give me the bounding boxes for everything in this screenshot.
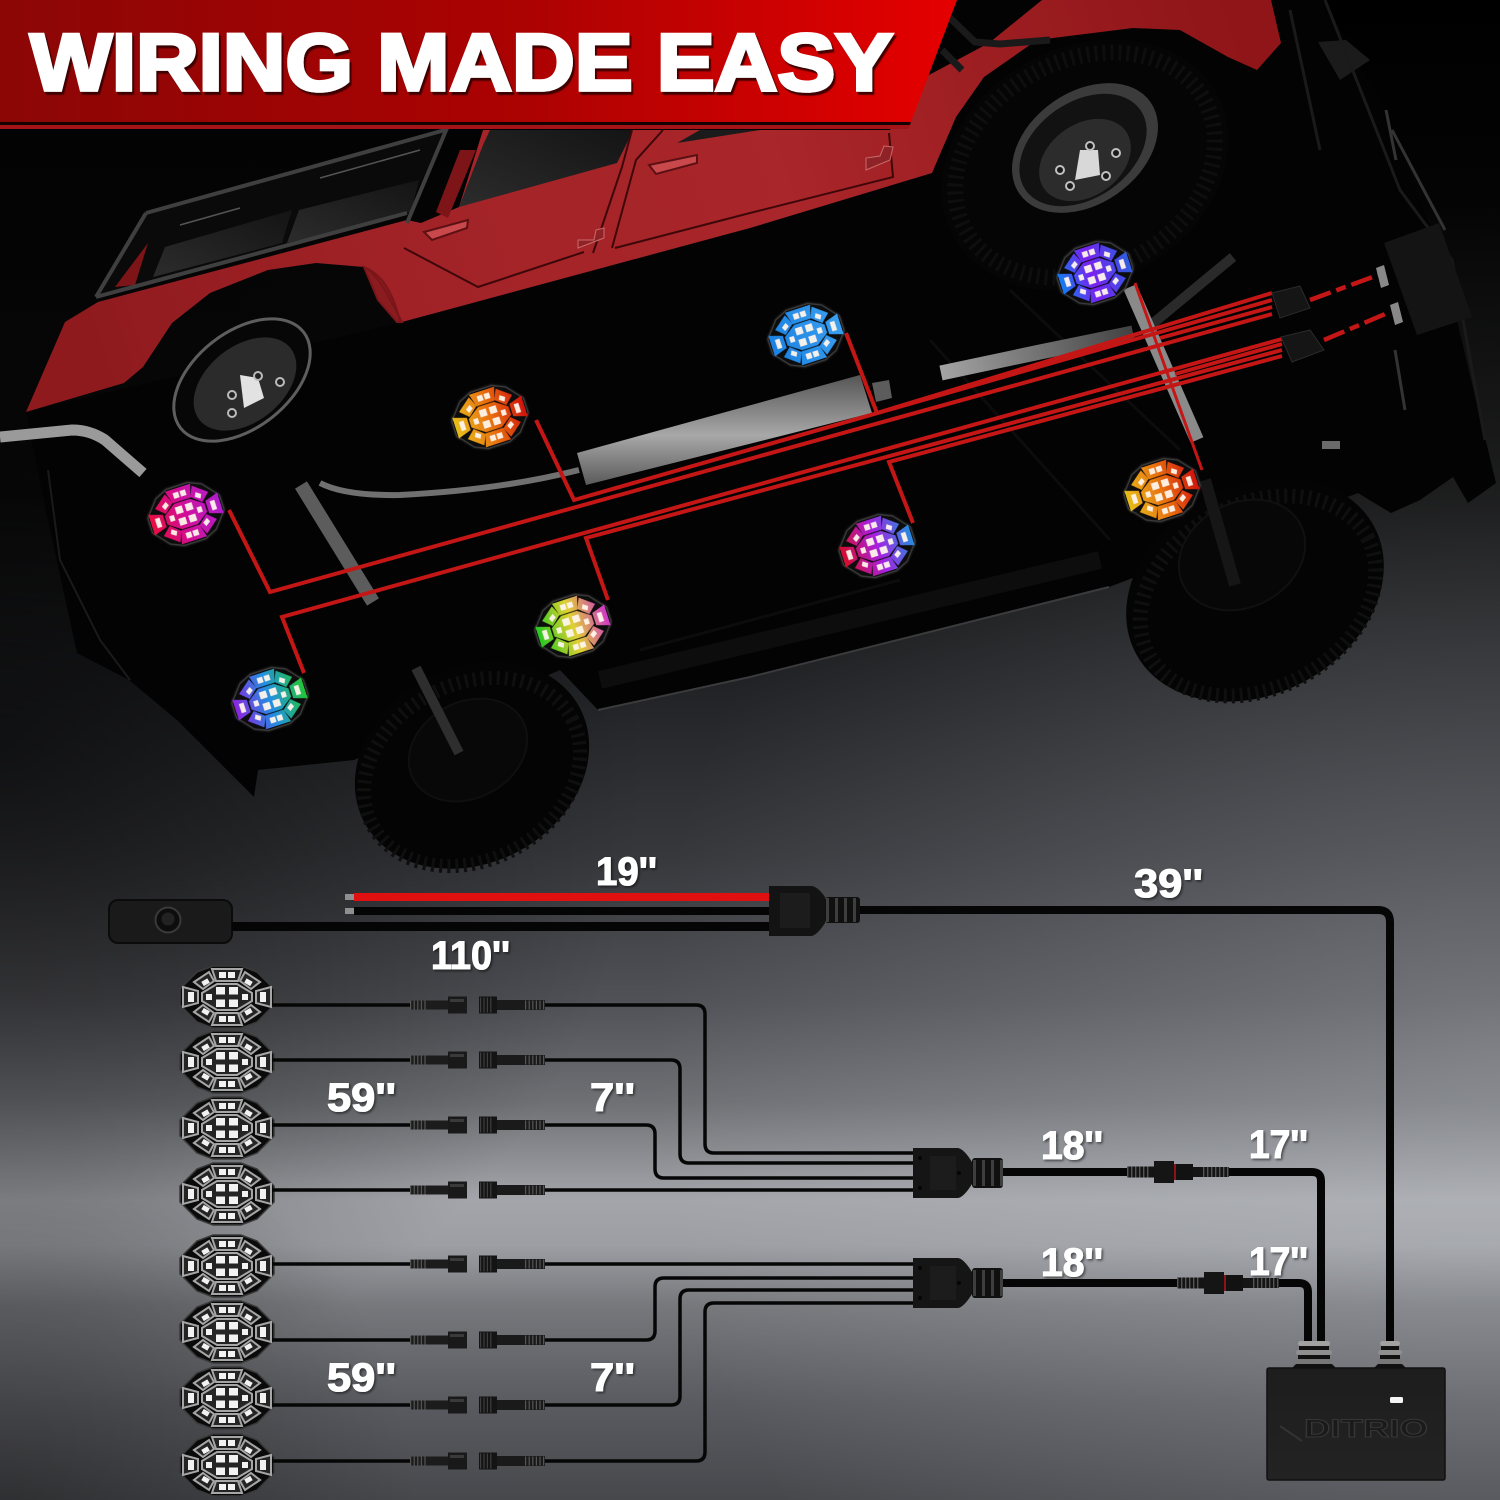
glowing rock light: yellow to red <box>445 377 535 457</box>
length label 39 in: 39'' <box>1134 862 1203 906</box>
upper Y connector <box>913 1148 1003 1198</box>
door windows <box>436 130 760 218</box>
lower chassis edge <box>48 290 1180 710</box>
length label lower 7 in: 7'' <box>590 1356 635 1400</box>
glowing rock light: pink <box>141 474 231 554</box>
length label lower 59 in: 59'' <box>327 1356 396 1400</box>
glowing rock light: sky blue <box>761 295 851 375</box>
wheel: upper right spare tire <box>897 0 1273 340</box>
red power lead <box>345 893 770 901</box>
vehicle underside silhouette <box>26 0 1496 797</box>
39 inch cable <box>860 910 1390 1342</box>
red body panel <box>26 0 1281 412</box>
exhaust pipes and crossbars <box>301 257 1233 602</box>
engine bay cables <box>942 18 1050 70</box>
lower trunk cable <box>1003 1272 1308 1342</box>
switch cable <box>232 922 772 931</box>
glowing rock light: violet blue <box>1050 233 1140 313</box>
length label lower 17 in: 17'' <box>1249 1240 1308 1284</box>
control box: DITRIO <box>1304 1415 1428 1443</box>
length label 19 in: 19'' <box>596 850 657 894</box>
red wiring overlay <box>229 275 1390 673</box>
length label upper 18 in: 18'' <box>1041 1124 1103 1168</box>
length label upper 17 in: 17'' <box>1249 1123 1308 1167</box>
power switch <box>109 900 232 943</box>
front bumper and bracket <box>1290 0 1485 449</box>
inline waterproof plugs <box>410 996 545 1470</box>
length label upper 59 in: 59'' <box>327 1076 396 1120</box>
lower group rock lights <box>180 1235 274 1496</box>
wheel: bottom right tire <box>1087 435 1423 745</box>
length label 110 in: 110'' <box>431 934 510 978</box>
glowing rock light: magenta <box>832 506 922 586</box>
upper trunk cable <box>1003 1161 1321 1342</box>
control box <box>1267 1341 1445 1480</box>
title: WIRING MADE EASY <box>30 18 893 108</box>
length label upper 7 in: 7'' <box>590 1076 635 1120</box>
glowing rock light: blue green <box>225 659 315 739</box>
length label lower 18 in: 18'' <box>1041 1241 1103 1285</box>
main connector <box>769 886 860 936</box>
wheel: upper left rim <box>151 294 333 466</box>
light cables <box>272 1005 925 1461</box>
vehicle harness connectors <box>1272 265 1403 362</box>
title banner <box>0 0 957 129</box>
door seams, handles and hinges <box>404 130 893 287</box>
wheel: bottom left tire <box>318 621 626 909</box>
roof rack and rear windows <box>96 128 447 297</box>
upper group rock lights <box>180 966 274 1225</box>
wiring diagram <box>109 850 1445 1496</box>
lower Y connector <box>913 1258 1003 1308</box>
glowing rock light: green <box>528 586 618 666</box>
glowing rock light: amber <box>1117 450 1207 530</box>
rear wheel-arch flare <box>364 267 402 322</box>
rear bumper tube <box>0 430 143 473</box>
black power lead <box>345 907 770 915</box>
